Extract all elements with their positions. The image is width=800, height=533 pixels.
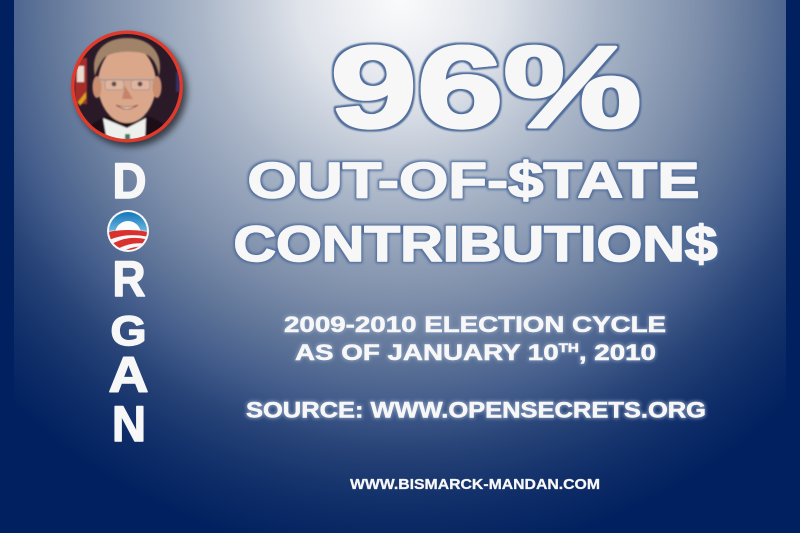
- portrait photo: [70, 30, 187, 147]
- Obama logo as letter O: [106, 210, 150, 252]
- text: source: SOURCE: WWW.OPENSECRETS.ORG: [246, 398, 706, 422]
- letter R: R: [112, 251, 146, 307]
- text: as of date: AS OF JANUARY 10: [295, 340, 504, 365]
- headline: 96%: 96%: [330, 22, 642, 152]
- letter A: A: [108, 347, 148, 403]
- text: as of date: , 2010: [579, 340, 656, 365]
- text: election cycle: 2009-2010 ELECTION CYCLE: [284, 312, 666, 337]
- text: as of date: TH: [559, 341, 579, 355]
- letter G: G: [110, 307, 146, 354]
- name: DORGAN vertical lettering: [107, 162, 149, 442]
- letter D: D: [112, 153, 146, 209]
- letter N: N: [112, 396, 146, 452]
- heading: out-of-state: OUT-OF-$TATE: [248, 152, 700, 208]
- heading: contributions: CONTRIBUTION$: [234, 216, 718, 272]
- footer url: WWW.BISMARCK-MANDAN.COM: [350, 477, 600, 493]
